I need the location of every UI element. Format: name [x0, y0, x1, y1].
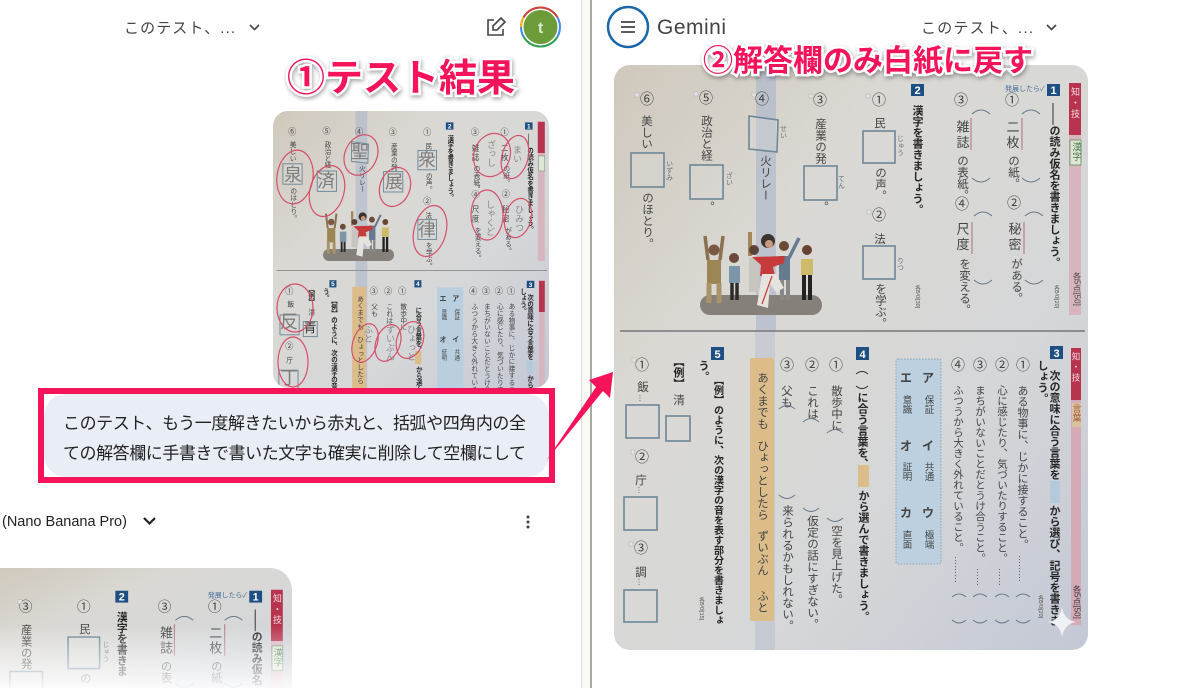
section 2: kanji writing: じゅう: [896, 135, 904, 156]
section 3: word meanings: ①: [1016, 357, 1030, 373]
section 4: fill in the words: ①: [829, 357, 843, 373]
graded test photo: を学ぶ。: [424, 242, 433, 269]
arrow: [546, 372, 613, 461]
section 4: fill in the words: 4: [859, 349, 866, 361]
generated test photo, cropped: 産業の発: [20, 623, 32, 670]
graded test photo: ①: [423, 128, 431, 137]
generated test photo, cropped: じゅう: [101, 641, 108, 662]
section 5: kanji sound parts: ③: [634, 540, 648, 556]
section 5: kanji sound parts: …: [636, 486, 646, 494]
word choices panel: オ: [900, 439, 912, 453]
graded test photo: 飯: [286, 301, 294, 309]
section 1: kanji reading: ④: [955, 196, 969, 212]
graded test photo: 法: [424, 211, 432, 220]
graded test photo: イ: [452, 336, 459, 344]
graded test photo: 心に感じたり、気づいたりすること。: [495, 302, 504, 420]
section 3: word meanings: 各5点[20]: [1037, 594, 1044, 619]
graded test photo: ⑥: [288, 127, 296, 136]
graded test photo: ③: [471, 128, 479, 137]
generated test photo, cropped: の読み仮名: [250, 631, 263, 686]
model selector: (Nano Banana Pro): [2, 514, 127, 530]
section 4: fill in the words: ②: [805, 357, 819, 373]
section 1-2 top: kanji writing left columns: 。: [816, 201, 828, 212]
icon: title chevron: [250, 25, 259, 30]
section 3: word meanings: 心に感じたり、気づいたりすること。: [996, 385, 1008, 564]
generated test photo, cropped: 発展したら✓: [208, 591, 247, 600]
word choices panel: 直面: [900, 529, 912, 550]
graded test photo: ③: [389, 128, 397, 137]
section 3: word meanings: ………: [953, 556, 963, 583]
section 2: kanji writing: を学ぶ。: [874, 283, 887, 329]
generated test photo, cropped: [0, 568, 292, 688]
generated test photo, cropped: 漢字: [272, 647, 283, 667]
section 1: kanji reading: 二枚: [1004, 120, 1020, 151]
heading: test result: ①テスト結果: [287, 58, 515, 100]
generated test photo, cropped: 二枚: [207, 626, 222, 657]
graded test photo: 美しい: [288, 140, 296, 162]
section 1-2 top: kanji writing left columns: 政治と経: [700, 114, 713, 162]
section 2: kanji writing: 法: [873, 233, 886, 245]
section 3: word meanings: しょう。: [1036, 360, 1048, 404]
section 5: kanji sound parts: …: [638, 394, 646, 402]
section 1-2 top: kanji writing left columns: のほとり。: [641, 192, 653, 250]
section 5: kanji sound parts: 清: [672, 394, 685, 406]
word choices panel: ウ: [922, 506, 934, 520]
side tab: kanji: 漢字: [1070, 141, 1082, 161]
section 1: kanji reading: 尺度: [954, 222, 970, 253]
word choices panel: 共通: [922, 462, 934, 482]
section 1: kanji reading: 秘密: [1006, 222, 1022, 253]
section 1: kanji reading: を変える。: [958, 258, 971, 316]
handwritten answers: ひみつ: [514, 205, 524, 232]
section 5: kanji sound parts: 【例】: [672, 356, 684, 389]
icon: highlighted menu: [608, 7, 648, 47]
graded test photo: [273, 111, 549, 388]
graded test photo: の読み仮名を書きましょう。: [526, 147, 534, 233]
word choices panel: 意識: [900, 394, 912, 415]
word choices panel: 極端: [922, 529, 934, 550]
graded test photo: ③: [482, 287, 490, 296]
graded test photo: 散歩中に: [399, 302, 407, 331]
callout: prompt: このテスト、もう一度解きたいから赤丸と、括弧や四角内の全: [63, 414, 526, 433]
handwritten answers: 律: [418, 220, 436, 240]
section 4: fill in the words: 仮定の話にすぎない。: [806, 515, 819, 630]
graded test photo: がある。: [504, 226, 512, 254]
section 5: kanji sound parts: 各5点[15]: [698, 596, 705, 621]
section 5: kanji sound parts: …: [636, 578, 646, 586]
graded test photo: の表紙。: [472, 165, 480, 193]
section 1-2 top: kanji writing left columns: [631, 90, 845, 250]
graded test photo: 5: [331, 281, 335, 288]
section 3: word meanings: ふつうから大きく外れていること。: [952, 385, 964, 553]
section 1: kanji reading: ③: [954, 92, 968, 108]
handwritten answers: 済: [317, 171, 335, 191]
cleaned test photo: [614, 65, 1088, 650]
section 4: fill in the words: 父も: [780, 385, 793, 408]
graded test photo: の声。: [424, 172, 433, 193]
illustration: torch relay crowd: [700, 232, 822, 315]
handwritten answers: 聖: [351, 142, 369, 162]
section 5: kanji sound parts: 庁: [634, 474, 647, 486]
handwritten answers: まい: [512, 145, 522, 163]
side tab: kanji: 各5点[50]: [1072, 271, 1082, 306]
section 5: kanji sound parts: 【例】のように、次の漢字の音を表す部分を書きましょ: [712, 375, 724, 625]
app name: Gemini: [657, 16, 726, 39]
graded test photo: ①: [398, 287, 406, 296]
handwritten answers: 反: [280, 312, 298, 332]
graded test photo: 意識: [440, 308, 447, 322]
graded test photo: ④: [469, 287, 477, 296]
handwritten answers: ひょっと: [406, 325, 416, 361]
graded test photo: ふつうから大きく外れていること。: [470, 303, 478, 413]
graded test photo: 尺度: [471, 205, 480, 224]
handwritten answers: [280, 139, 524, 388]
handwritten answers: しゃくど: [485, 200, 495, 236]
section 2: kanji writing: ①: [872, 92, 886, 108]
section 1: kanji reading: 雑誌: [954, 119, 970, 151]
graded test photo: から選び、: [526, 375, 534, 408]
generated test photo, cropped: 1: [253, 592, 259, 604]
generated test photo, cropped: 2: [119, 592, 125, 604]
section 1: kanji reading: 1: [1050, 85, 1057, 97]
word bank band: ずいぶん: [756, 530, 769, 576]
graded test photo: オ: [439, 336, 446, 344]
graded test photo: 証明: [440, 349, 447, 362]
word bank band: あくまでも: [756, 372, 769, 430]
graded test photo: 共通: [453, 348, 459, 362]
graded test photo: ②: [285, 342, 293, 351]
section 1-2 top: kanji writing left columns: 産業の発: [814, 117, 827, 165]
graded test photo: エ: [439, 295, 446, 303]
section 4: fill in the words: ③: [780, 357, 794, 373]
panel divider: [581, 0, 592, 688]
chat title: このテスト、...: [921, 20, 1033, 37]
graded test photo: 庁: [285, 356, 293, 363]
graded test photo: 【例】: [307, 286, 315, 305]
graded test photo: ア: [452, 295, 459, 303]
side tab: language: 言葉: [1072, 404, 1082, 423]
avatar: t: [538, 20, 544, 37]
section 3: word meanings: ……: [997, 568, 1007, 586]
graded test photo: 2: [448, 123, 452, 130]
graded test photo: ③: [370, 287, 378, 296]
handwritten answers: ざっし: [486, 139, 496, 167]
section 1-2 top: kanji writing left columns: いずみ: [666, 160, 673, 181]
generated test photo, cropped: ③: [19, 599, 33, 614]
section 1-2 top: kanji writing left columns: 火リレー: [759, 155, 772, 201]
section 3: word meanings: 次の意味に合う言葉を: [1048, 369, 1060, 480]
section 3: word meanings: から選び、記号を書きま: [1048, 505, 1060, 626]
section 4: fill in the words: 来られるかもしれない。: [781, 505, 794, 632]
section 3: word meanings: ………: [1017, 555, 1027, 582]
word choices panel: カ: [900, 506, 912, 520]
graded test photo: まちがいないことだとうけ合うこと。: [483, 303, 491, 420]
graded test photo: ④: [471, 190, 480, 199]
icon: sparkle: [1048, 607, 1076, 637]
section 1-2 top: kanji writing left columns: ③: [813, 92, 827, 108]
section 5: kanji sound parts: 5: [714, 349, 721, 361]
panel: right chat header: [608, 7, 1056, 47]
side tab: language: [1071, 348, 1082, 625]
graded test photo: 産業の発: [389, 142, 398, 172]
generated test photo, cropped: ③: [158, 599, 172, 614]
graded test photo: のはとり。: [289, 187, 297, 222]
generated test photo, cropped: ①: [208, 599, 222, 614]
graded test photo: 清: [307, 307, 315, 316]
graded test photo: の紙。: [502, 165, 510, 186]
section 1: kanji reading: ①: [1005, 92, 1019, 108]
generated test photo, cropped: の紙: [210, 661, 222, 684]
section 2: kanji writing: の声。: [874, 167, 887, 202]
section 4: fill in the words: 空を見上げた。: [830, 525, 843, 606]
graded test photo: 漢字を書きましょう。: [446, 134, 454, 201]
graded test photo: から選んで: [414, 366, 423, 399]
section 1: kanji reading: の表紙。: [956, 155, 969, 201]
word bank band: ふと: [756, 590, 769, 613]
icon: edit: [488, 18, 505, 35]
side tab: language: 各5点[50]: [1072, 584, 1082, 619]
graded test photo: ②: [423, 197, 431, 206]
side tab: language: 知・技: [1071, 351, 1081, 384]
graded test photo: 保証: [453, 308, 459, 322]
chat title: このテスト、...: [124, 20, 235, 37]
handwritten answers: 衆: [418, 150, 436, 170]
icon: model chevron: [144, 518, 155, 524]
section 5: kanji sound parts: 飯: [636, 381, 649, 393]
graded test photo: これは: [385, 303, 393, 324]
graded test photo: ②: [502, 190, 510, 199]
handwritten answers: ふと: [363, 325, 373, 343]
section 2: kanji writing: 漢字を書きましょう。: [911, 104, 924, 215]
section 2: kanji writing: 民: [873, 117, 886, 129]
red circle marks: [273, 128, 536, 387]
graded test photo: 1: [527, 123, 531, 130]
section 3: word meanings: まちがいないことだとうけ合うこと。: [974, 385, 986, 564]
generated test photo, cropped: ①: [77, 599, 91, 614]
side tab: kanji: [1069, 83, 1082, 315]
graded test photo: ②: [495, 287, 503, 296]
word choices panel: 証明: [900, 462, 912, 482]
graded test photo: ⑤: [322, 127, 331, 136]
section 3: word meanings: [951, 346, 1063, 626]
graded test photo: ②: [384, 287, 392, 296]
graded test photo: 秘密: [501, 204, 510, 224]
heading: reset answer fields: ②解答欄のみ白紙に戻す: [703, 45, 1033, 78]
generated test photo, cropped: の: [79, 672, 91, 684]
section 2: kanji writing: りつ: [896, 257, 904, 271]
handwritten answers: 丁: [280, 368, 298, 388]
side tab: kanji: 知・技: [1070, 86, 1080, 120]
section 1: kanji reading: 各5点[20]: [1053, 284, 1060, 309]
section 3: word meanings: 3: [1053, 348, 1060, 360]
section 1-2 top: kanji writing left columns: 。: [702, 201, 714, 212]
graded test photo: 政治と経: [323, 140, 331, 170]
section 4: fill in the words: 散歩中に: [830, 384, 843, 431]
graded test photo: あくまでも: [356, 295, 364, 330]
callout: prompt: [38, 388, 555, 483]
handwritten answers: 展: [385, 172, 403, 192]
graded test photo: を変える。: [473, 227, 482, 261]
section 2: kanji writing: 各5点[30]: [914, 284, 921, 309]
section 1-2 top: kanji writing left columns: 美しい: [640, 114, 653, 150]
handwritten answers: 青: [303, 320, 317, 335]
generated test photo, cropped: の表: [160, 661, 172, 683]
section 4: fill in the words: に合う言葉を、: [856, 392, 868, 469]
word choices panel: ア: [922, 371, 934, 385]
section 3: word meanings: ②: [995, 357, 1009, 373]
section 5: kanji sound parts: 調: [634, 566, 647, 578]
graded test photo: ①: [501, 128, 509, 137]
section 4: fill in the words: [779, 347, 870, 632]
section 1-2 top: kanji writing left columns: せい: [780, 125, 787, 139]
section 2: kanji writing: ②: [872, 207, 886, 223]
generated test photo, cropped: 知・技: [272, 592, 282, 626]
avatar: [521, 8, 560, 46]
section 3: word meanings: ……: [975, 568, 985, 586]
graded test photo: 二枚: [500, 144, 509, 163]
graded test photo: 3: [529, 282, 533, 289]
handwritten answers: 泉: [284, 165, 302, 185]
section 4: fill in the words: これは: [806, 385, 819, 420]
word choices panel: 保証: [922, 394, 934, 415]
section 2: kanji writing: [863, 84, 924, 329]
graded test photo: ④: [355, 127, 363, 136]
section 3: word meanings: ③: [973, 357, 987, 373]
section 1-2 top: kanji writing left columns: ⑤: [699, 90, 713, 106]
section 1: kanji reading: ②: [1007, 195, 1021, 211]
graded test photo: 民: [424, 142, 432, 150]
graded test photo: に合う言葉を、: [414, 307, 422, 353]
section 5: kanji sound parts: ①: [635, 357, 649, 373]
word bank band: ひょっとしたら: [756, 440, 768, 520]
graded test photo: 雑誌: [471, 143, 480, 163]
graded test photo: う。: [321, 287, 329, 301]
section 1-2 top: kanji writing left columns: ④: [755, 91, 769, 107]
section 1: kanji reading: [954, 84, 1060, 316]
section 5: kanji sound parts: う。: [697, 360, 709, 382]
handwritten answers: ずいぶん: [385, 325, 395, 361]
icon: title chevron: [1047, 25, 1056, 30]
graded test photo: ①: [507, 287, 515, 296]
section 5: kanji sound parts: ②: [635, 449, 649, 465]
section 2: kanji writing: 2: [914, 85, 921, 97]
section 5: kanji sound parts: [624, 347, 724, 625]
graded test photo: 【例】のように、次の漢字の音を: [329, 297, 338, 396]
section 1: kanji reading: の読み仮名を書きましょう。: [1048, 125, 1060, 268]
callout: prompt: ての解答欄に手書きで書いた文字も確実に削除して空欄にして: [63, 443, 526, 463]
icon: more menu: [526, 516, 530, 528]
graded test photo: ①: [285, 287, 293, 296]
word bank band: [750, 358, 774, 621]
graded test photo: しょう。: [519, 288, 527, 314]
section 3: word meanings: ある物事に、じかに接すること。: [1016, 385, 1028, 550]
graded test photo: 4: [416, 281, 420, 288]
graded test photo: ある物事に、じかに接すること。: [507, 303, 515, 406]
section 1-2 top: kanji writing left columns: てん: [838, 175, 845, 189]
word choices panel: イ: [922, 439, 934, 453]
graded test photo: 火リレー: [357, 165, 366, 193]
model selector: [2, 514, 530, 530]
generated test photo, cropped: 民: [78, 623, 90, 635]
section 4: fill in the words: から選んで書きましょう。: [857, 490, 870, 622]
section 1: kanji reading: がある。: [1010, 258, 1023, 304]
graded test photo: 次の意味に合う言葉を: [526, 293, 534, 360]
generated test photo, cropped: 漢字を書きま: [115, 610, 128, 676]
section 1-2 top: kanji writing left columns: ざい: [726, 171, 733, 186]
graded test photo: ひょっとしたら: [356, 336, 364, 384]
section 3: word meanings: ④: [951, 357, 965, 373]
section 1: kanji reading: の紙。: [1007, 155, 1020, 190]
word choices panel: [896, 359, 941, 564]
section 1: kanji reading: 発展したら✓: [1005, 84, 1045, 93]
section 1-2 top: kanji writing left columns: ⑥: [640, 91, 654, 107]
graded test photo: 父も: [370, 303, 378, 317]
panel: left chat header: [124, 8, 560, 46]
generated test photo, cropped: 雑誌: [158, 625, 173, 657]
word choices panel: エ: [900, 371, 912, 385]
